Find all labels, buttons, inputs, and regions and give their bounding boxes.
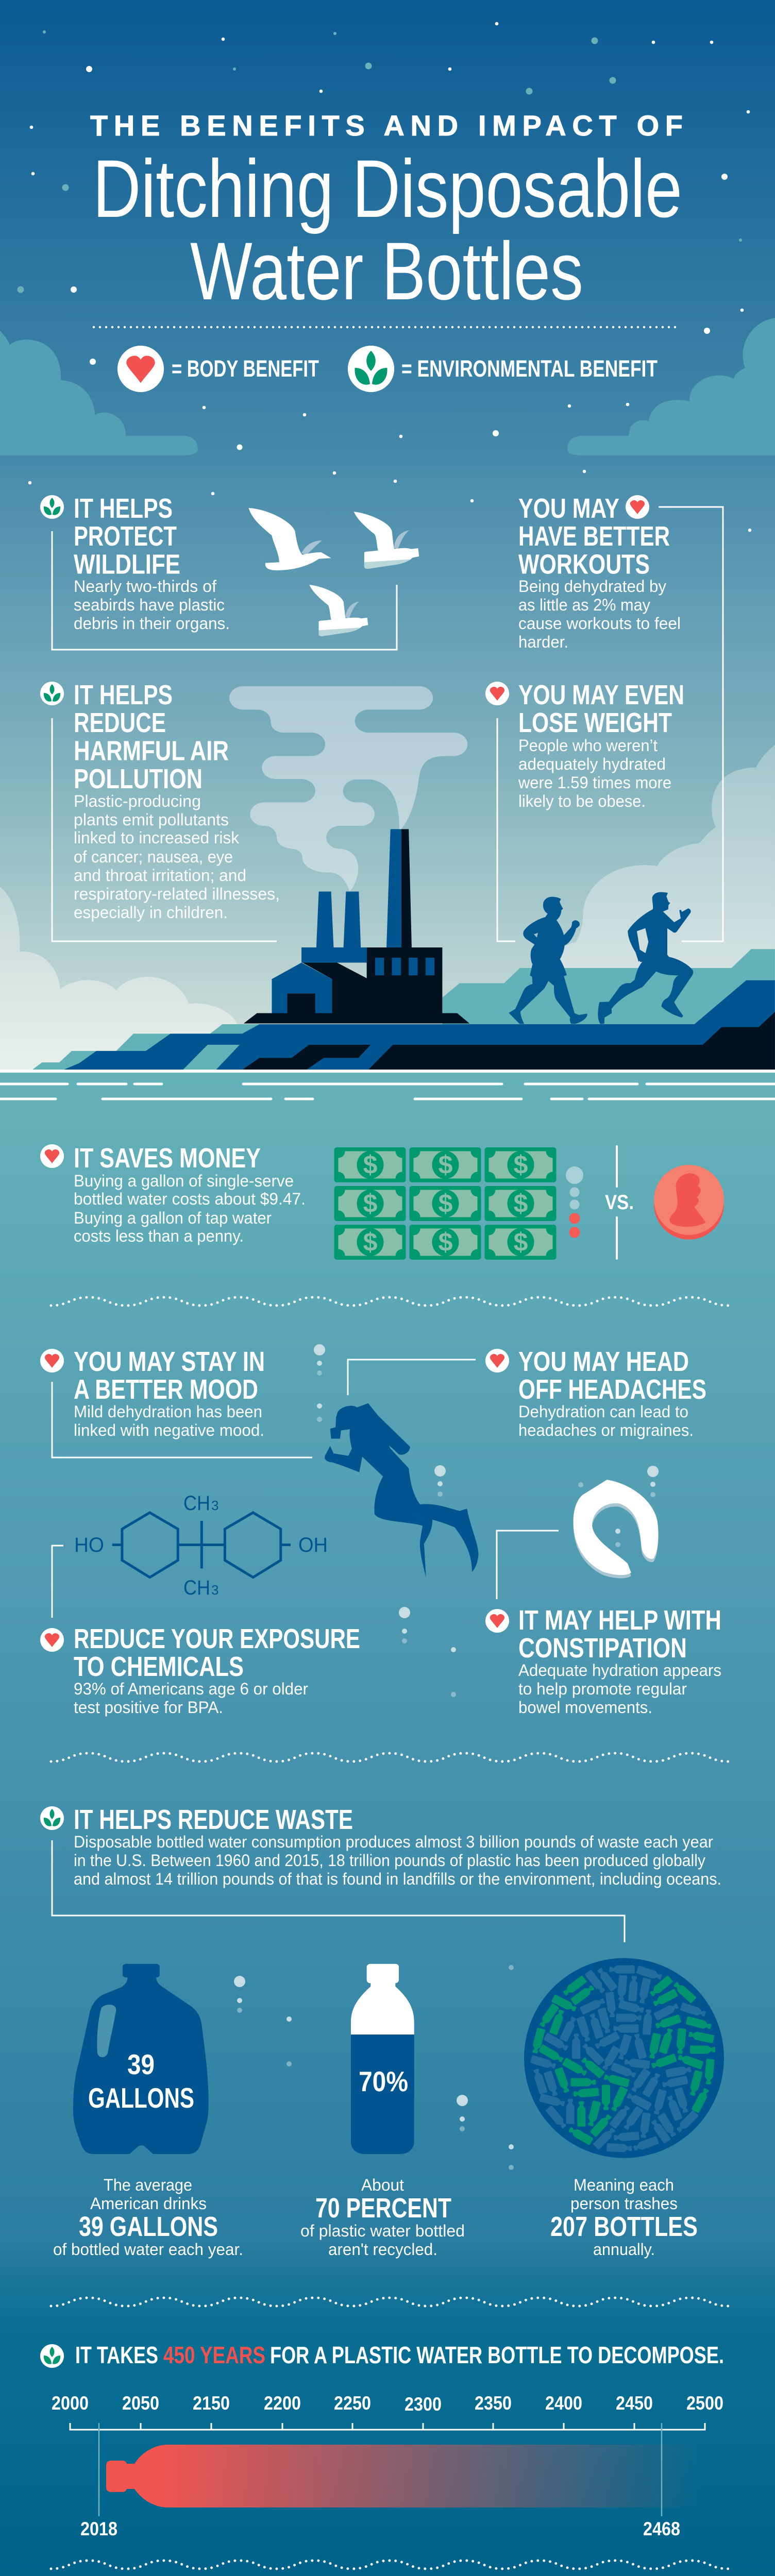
legend label: environmental benefit: = ENVIRONMENTAL BENEFIT: [401, 355, 658, 382]
body text: 93% of Americans age 6 or older: [74, 1680, 308, 1698]
illustration: ground layers: [32, 949, 775, 1070]
body text: in the U.S. Between 1960 and 2015, 18 trillion pounds of plastic has been produced globally: [74, 1851, 705, 1870]
heading: [74, 680, 229, 794]
body text: [74, 1833, 721, 1888]
body text: costs less than a penny.: [74, 1227, 244, 1245]
caption: 70 percent: 70 PERCENT: [315, 2193, 451, 2224]
body text: [518, 1661, 721, 1717]
illustration: dollar bills: $: [363, 1228, 378, 1257]
illustration: bpa molecule: 3: [211, 1582, 218, 1598]
heading: IT SAVES MONEY: [74, 1143, 261, 1174]
body text: respiratory-related illnesses,: [74, 885, 280, 903]
body text: Adequate hydration appears: [518, 1661, 721, 1680]
icon: body benefit heart: [117, 346, 164, 392]
timeline axis labels: 2500: [686, 2393, 723, 2414]
body text: to help promote regular: [518, 1680, 687, 1698]
timeline axis labels: 2300: [405, 2394, 442, 2415]
heading: REDUCE: [74, 707, 166, 738]
illustration: gallon jug: [73, 1964, 209, 2154]
heading: [74, 1346, 265, 1405]
legend: [117, 346, 658, 392]
illustration: penny: [654, 1165, 724, 1240]
background: water: [0, 1071, 775, 2576]
illustration: dollar bills: $: [363, 1189, 378, 1218]
timeline axis labels: 2400: [545, 2393, 582, 2414]
title line: main 2: Water Bottles: [190, 225, 583, 317]
icon: environmental: [40, 2344, 64, 2368]
body text: debris in their organs.: [74, 614, 230, 633]
body text: bottled water costs about $9.47.: [74, 1190, 306, 1208]
body text: [518, 736, 671, 810]
body text: cause workouts to feel: [518, 614, 681, 633]
timeline axis labels: 2050: [122, 2393, 159, 2414]
clouds: top: [0, 318, 775, 455]
illustration: factory: [244, 829, 469, 1023]
caption: 207 bottles: Meaning each: [574, 2176, 674, 2194]
illustration: dollar bills: $: [439, 1228, 453, 1257]
heading: YOU MAY EVEN: [518, 680, 684, 710]
illustration: bpa molecule: [74, 1492, 328, 1599]
body text: [74, 1402, 264, 1439]
icon: body: [485, 682, 509, 705]
heading: YOU MAY STAY IN: [74, 1346, 265, 1377]
body text: People who weren’t: [518, 736, 658, 755]
illustration: dollar bills: $: [514, 1150, 528, 1179]
title line: kicker: THE BENEFITS AND IMPACT OF: [90, 109, 683, 142]
heading: IT HELPS: [74, 493, 173, 524]
body text: [518, 1402, 694, 1439]
body text: headaches or migraines.: [518, 1421, 694, 1439]
body text: as little as 2% may: [518, 596, 650, 614]
bubbles: dots between bills and vs: [566, 1166, 583, 1238]
timeline axis labels: 2150: [193, 2393, 230, 2414]
body text: of cancer; nausea, eye: [74, 848, 233, 866]
panel: head off headaches: [348, 1346, 706, 1439]
heading: PROTECT: [74, 521, 177, 552]
heading: [75, 2342, 724, 2368]
body text: linked with negative mood.: [74, 1421, 264, 1439]
illustration: bpa molecule: CH: [183, 1577, 210, 1599]
body text: Nearly two-thirds of: [74, 577, 216, 596]
panel: constipation: [485, 1531, 721, 1717]
heading: IT MAY HELP WITH: [518, 1605, 721, 1636]
illustration: gallon jug: 39: [127, 2048, 155, 2080]
heading: LOSE WEIGHT: [518, 707, 672, 738]
heading: YOU MAY HEAD: [518, 1346, 689, 1377]
body text: especially in children.: [74, 903, 228, 922]
illustration: dollar bills: $: [514, 1189, 528, 1218]
caption: 39 gallons: 39 GALLONS: [79, 2211, 218, 2242]
illustration: dollar bills: $: [439, 1150, 453, 1179]
heading: [74, 1623, 360, 1682]
illustration: water bottle 70 percent: 70%: [359, 2065, 408, 2097]
caption: 70 percent: About: [361, 2176, 404, 2194]
body text: likely to be obese.: [518, 792, 646, 810]
body text: [74, 577, 230, 633]
caption: 39 gallons: The average: [104, 2176, 192, 2194]
body text: plants emit pollutants: [74, 810, 229, 829]
caption: 39 gallons: [53, 2176, 243, 2259]
clouds: horizon left: [0, 887, 237, 1070]
background: sky: [0, 0, 775, 1071]
icon: body: [40, 1628, 64, 1652]
marker labels: 2468: [643, 2518, 680, 2539]
illustration: runner left: [509, 897, 587, 1024]
panel: reduce waste: [40, 1804, 724, 2259]
icon: body: [626, 495, 649, 519]
heading: IT HELPS REDUCE WASTE: [74, 1804, 353, 1835]
stars: [18, 22, 751, 532]
timeline axis labels: 2450: [616, 2393, 653, 2414]
illustration: gallon jug: GALLONS: [88, 2082, 194, 2114]
body text: [518, 577, 681, 651]
heading: [518, 1605, 721, 1664]
illustration: dollar bills: [334, 1147, 557, 1260]
illustration: bpa molecule: HO: [74, 1534, 104, 1556]
illustration: bpa molecule: OH: [298, 1534, 328, 1556]
timeline axis labels: 2000: [52, 2393, 89, 2414]
icon: body: [485, 1609, 509, 1633]
illustration: runner right: [598, 892, 693, 1024]
timeline axis labels: 2350: [475, 2393, 512, 2414]
marker labels: [80, 2518, 680, 2539]
body text: [74, 792, 280, 922]
body text: [74, 1680, 308, 1717]
heading: HAVE BETTER: [518, 521, 670, 552]
body text: Disposable bottled water consumption produces almost 3 billion pounds of waste each year: [74, 1833, 713, 1851]
bubbles: mid water: [234, 1344, 659, 2170]
panel: reduce exposure to chemicals: [40, 1546, 360, 1717]
heading: [518, 680, 684, 738]
body text: were 1.59 times more: [518, 773, 671, 792]
body text: bowel movements.: [518, 1698, 652, 1717]
caption: 207 bottles: 207 BOTTLES: [550, 2211, 698, 2242]
body text: linked to increased risk: [74, 828, 240, 847]
heading: REDUCE YOUR EXPOSURE: [74, 1623, 360, 1654]
caption: 70 percent: of plastic water bottled: [300, 2222, 465, 2240]
illustration: smoke: [229, 686, 467, 892]
illustration: dollar bills: $: [439, 1189, 453, 1218]
caption: 207 bottles: [550, 2176, 698, 2259]
icon: body: [40, 1349, 64, 1372]
caption: 207 bottles: person trashes: [570, 2194, 678, 2213]
heading: [518, 1346, 706, 1405]
bottle decomposing bar: [106, 2445, 702, 2507]
body text: Being dehydrated by: [518, 577, 666, 596]
heading: IT HELPS: [74, 680, 173, 710]
panel: better workouts: [518, 493, 723, 941]
title: [90, 109, 683, 317]
panel: protect wildlife: [40, 493, 419, 650]
body text: Dehydration can lead to: [518, 1402, 688, 1421]
heading: HARMFUL AIR: [74, 736, 229, 767]
heading: CONSTIPATION: [518, 1633, 687, 1664]
icon: environmental: [40, 495, 64, 519]
illustration: bpa molecule: 3: [211, 1498, 218, 1513]
timeline axis labels: [52, 2393, 723, 2415]
body text: and throat irritation; and: [74, 866, 246, 885]
heading: [518, 493, 670, 580]
body text: and almost 14 trillion pounds of that is found in landfills or the environment, including oceans.: [74, 1870, 721, 1888]
timeline axis labels: 2200: [264, 2393, 301, 2414]
heading: OFF HEADACHES: [518, 1374, 706, 1405]
icon: environmental: [40, 1806, 64, 1830]
illustration: toilet seat: [574, 1480, 659, 1579]
heading: [74, 493, 180, 580]
body text: seabirds have plastic: [74, 596, 225, 614]
icon: environmental benefit leaf: [348, 346, 394, 392]
body text: Plastic-producing: [74, 792, 201, 810]
body text: harder.: [518, 633, 568, 651]
marker labels: 2018: [80, 2518, 117, 2539]
panel: harmful air pollution: [40, 680, 280, 941]
panel: lose weight: [485, 680, 684, 941]
panel: saves money: [40, 1143, 724, 1260]
body text: adequately hydrated: [518, 755, 666, 773]
illustration: dollar bills: $: [363, 1150, 378, 1179]
heading: IT TAKES: [75, 2342, 158, 2368]
heading: TO CHEMICALS: [74, 1651, 244, 1682]
body text: Mild dehydration has been: [74, 1402, 262, 1421]
body text: Buying a gallon of single-serve: [74, 1172, 294, 1190]
heading: WILDLIFE: [74, 549, 180, 580]
vs label: VS.: [605, 1191, 634, 1214]
timeline axis labels: 2250: [334, 2393, 371, 2414]
illustration: seabirds: [248, 508, 419, 636]
icon: body: [485, 1349, 509, 1372]
heading: POLLUTION: [74, 764, 203, 794]
icon: body: [40, 1144, 64, 1168]
caption: 207 bottles: annually.: [593, 2240, 655, 2259]
illustration: circle of discarded bottles: [524, 1958, 724, 2158]
panel: 450 years timeline: [40, 2342, 724, 2539]
body text: test positive for BPA.: [74, 1698, 223, 1717]
illustration: water bottle 70 percent: [351, 1964, 414, 2154]
body text: Buying a gallon of tap water: [74, 1209, 272, 1227]
caption: 70 percent: [300, 2176, 465, 2259]
heading: 450 YEARS: [163, 2342, 265, 2368]
caption: 39 gallons: American drinks: [90, 2194, 207, 2213]
clouds: horizon right: [519, 745, 775, 1018]
illustration: dollar bills: $: [514, 1228, 528, 1257]
caption: 39 gallons: of bottled water each year.: [53, 2240, 243, 2259]
legend label: body benefit: = BODY BENEFIT: [172, 355, 319, 382]
heading: WORKOUTS: [518, 549, 650, 580]
illustration: diver: [325, 1403, 478, 1578]
heading: A BETTER MOOD: [74, 1374, 258, 1405]
icon: environmental: [40, 682, 64, 705]
illustration: bpa molecule: CH: [183, 1492, 210, 1515]
caption: 70 percent: aren't recycled.: [328, 2240, 437, 2259]
body text: [74, 1172, 306, 1245]
heading: YOU MAY: [518, 493, 619, 524]
panel: better mood: [40, 1346, 312, 1458]
